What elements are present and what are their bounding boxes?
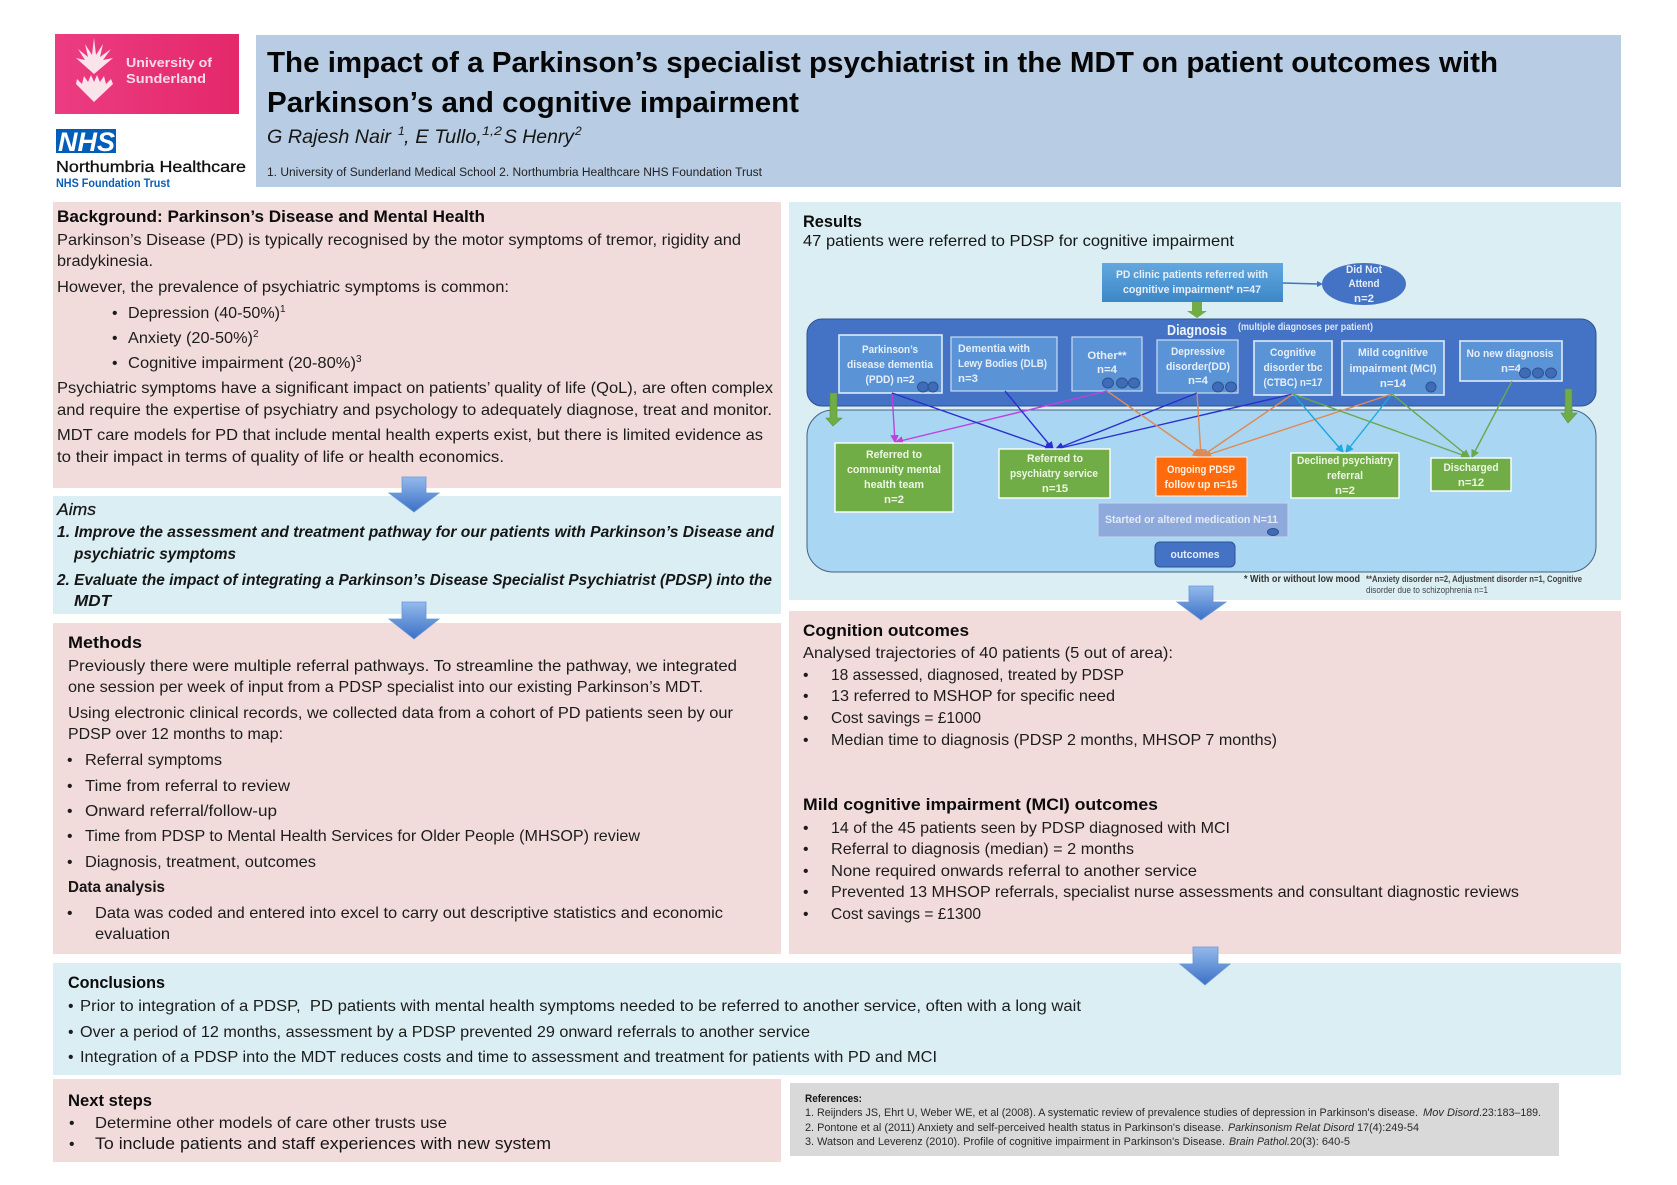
box: discharged — [1431, 458, 1511, 491]
list: data mapped: Diagnosis, treatment, outcomes — [85, 854, 316, 871]
text block: methods intro: Previously there were multiple referral pathways. To streamline the pathway, we integrated — [68, 658, 737, 675]
text block: conclusions list: • — [68, 1049, 74, 1066]
box: PDD: (PDD) n=2 — [866, 374, 914, 386]
text block: aims list: psychiatric symptoms — [73, 546, 236, 563]
authors: 2 — [574, 124, 582, 138]
text block: MCI outcomes: • — [803, 820, 809, 837]
text block: aims list: MDT — [74, 593, 112, 610]
text block: data analysis: evaluation — [95, 926, 170, 943]
authors — [267, 124, 582, 148]
text block: data analysis: • — [67, 905, 73, 922]
heading: next steps: Next steps — [68, 1092, 152, 1110]
text block: next steps list: To include patients and staff experiences with new system — [95, 1134, 551, 1153]
authors: S Henry — [504, 126, 575, 148]
box: cognitive disorder tbc — [1254, 341, 1332, 395]
box: mild cognitive impairment — [1342, 341, 1444, 395]
list: data mapped: • — [67, 778, 73, 795]
panel: background — [53, 202, 781, 488]
arrow: background to aims — [389, 477, 439, 512]
panel: methods — [53, 623, 781, 954]
ellipse: did not attend — [1322, 263, 1406, 305]
box: psychiatry service — [999, 449, 1110, 498]
arrow: referrals to did not attend — [1283, 281, 1323, 287]
text block: background body: Parkinson’s Disease (PD) is typically recognised by the motor symptoms of tremor, rigidity and — [57, 232, 741, 249]
box: PD clinic referrals — [1102, 263, 1283, 302]
text block: methods intro: Using electronic clinical records, we collected data from a cohort of PD patients seen by our — [68, 705, 733, 722]
panel: references: Brain Pathol. — [1229, 1136, 1290, 1148]
panel: references: 2. Pontone et al (2011) Anxiety and self-perceived health status in Parkinson's disease. — [805, 1122, 1224, 1134]
box: PD clinic referrals: PD clinic patients referred with — [1116, 269, 1268, 281]
text block: MCI outcomes: • — [803, 884, 809, 901]
text block: background body: • — [112, 355, 118, 372]
box: PDD: disease dementia — [847, 359, 934, 371]
text block: aims list: 1. Improve the assessment and treatment pathway for our patients with Parkinson’s Disease and — [57, 524, 774, 541]
logo: NHS Northumbria Healthcare — [56, 127, 246, 190]
box: cognitive disorder tbc: disorder tbc — [1264, 362, 1322, 374]
text block: conclusions list: Integration of a PDSP into the MDT reduces costs and time to assessment and treatment for patients with PD and MCI — [80, 1049, 937, 1066]
box: no new diagnosis: n=4 — [1501, 363, 1522, 375]
box: ongoing follow up: follow up n=15 — [1164, 479, 1238, 491]
label: outcomes: outcomes — [1170, 549, 1220, 561]
text block: cognition outcomes: • — [803, 667, 809, 684]
box: DLB: n=3 — [958, 373, 978, 385]
text block: conclusions list — [68, 998, 1082, 1066]
box: ongoing follow up: Ongoing PDSP — [1167, 464, 1235, 476]
arrow: outcomes to conclusions — [1180, 947, 1230, 985]
box: ongoing follow up — [1156, 457, 1247, 496]
text block: next steps list: • — [69, 1136, 75, 1153]
panel: aims — [53, 496, 781, 614]
box: community mental health team: community mental — [847, 464, 941, 476]
connectors: diagnosis to outcome — [892, 381, 1512, 457]
title banner — [256, 35, 1621, 187]
ellipse: did not attend: Attend — [1348, 278, 1380, 290]
text block: cognition outcomes: • — [803, 710, 809, 727]
footnotes: disorder due to schizophrenia n=1 — [1366, 584, 1488, 595]
box: DLB: Lewy Bodies (DLB) — [958, 358, 1047, 370]
text block: background body: • — [112, 330, 118, 347]
box: psychiatry service: n=15 — [1042, 483, 1069, 495]
text block: MCI outcomes — [803, 820, 1519, 923]
text block: background body: Cognitive impairment (20-80%) — [128, 355, 356, 372]
text: results summary: 47 patients were referred to PDSP for cognitive impairment — [803, 233, 1235, 250]
logo: University of Sunderland: Sunderland — [126, 71, 206, 86]
heading: aims: Aims — [56, 501, 96, 519]
box: cognitive disorder tbc: Cognitive — [1270, 347, 1316, 359]
panel: next steps — [53, 1079, 781, 1162]
box: declined referral: n=2 — [1335, 485, 1355, 497]
text block: background body: and require the expertise of psychiatry and psychology to adequately diagnose, treat and monitor. — [57, 402, 772, 419]
arrow: diagnosis to outcomes right — [1561, 389, 1577, 423]
text block: background body: Anxiety (20-50%) — [128, 330, 253, 347]
heading: results: Results — [803, 213, 862, 231]
box: medication: Started or altered medication N=11 — [1105, 514, 1279, 526]
text block: cognition outcomes: Analysed trajectories of 40 patients (5 out of area): — [803, 645, 1173, 662]
text block: data analysis: Data was coded and entered into excel to carry out descriptive statistics and economic — [95, 905, 723, 922]
box: community mental health team: Referred to — [866, 449, 922, 461]
text block: conclusions list: • — [68, 1024, 74, 1041]
text block: aims list — [56, 524, 774, 610]
logo: NHS Northumbria Healthcare: Northumbria Healthcare — [56, 159, 246, 176]
box: declined referral — [1291, 453, 1399, 498]
text block: MCI outcomes: Prevented 13 MHSOP referrals, specialist nurse assessments and consultant diagnostic reviews — [831, 884, 1519, 901]
box: mild cognitive impairment: Mild cognitive — [1358, 347, 1428, 359]
heading: cognition outcomes: Cognition outcomes — [803, 622, 969, 640]
box: discharged: Discharged — [1444, 462, 1499, 474]
logo: NHS Northumbria Healthcare: NHS — [58, 127, 115, 157]
box: depressive disorder: n=4 — [1188, 375, 1209, 387]
list: data mapped: • — [67, 803, 73, 820]
box: mild cognitive impairment: n=14 — [1380, 378, 1407, 390]
note: multiple diagnoses: (multiple diagnoses per patient) — [1238, 322, 1373, 333]
box: discharged: n=12 — [1458, 477, 1484, 489]
text block: MCI outcomes: • — [803, 906, 809, 923]
text block: cognition outcomes: Cost savings = £1000 — [831, 710, 981, 727]
box: DLB: Dementia with — [958, 343, 1030, 355]
text block: MCI outcomes: Referral to diagnosis (median) = 2 months — [831, 841, 1134, 858]
list: data mapped — [67, 752, 641, 871]
footnotes — [1244, 573, 1582, 595]
text block: MCI outcomes: • — [803, 863, 809, 880]
band: outcomes — [807, 410, 1596, 572]
footnotes: **Anxiety disorder n=2, Adjustment disorder n=1, Cognitive — [1366, 573, 1582, 584]
text block: conclusions list: Prior to integration of a PDSP, PD patients with mental health symptoms needed to be referred to another service, often with a long wait — [80, 998, 1082, 1015]
panel: references: 3. Watson and Leverenz (2010). Profile of cognitive impairment in Parkinson's Disease. — [805, 1136, 1225, 1148]
box: DLB — [951, 337, 1057, 391]
list: data mapped: • — [67, 752, 73, 769]
box: PDD — [839, 335, 942, 393]
heading: background: Background: Parkinson’s Disease and Mental Health — [57, 208, 485, 226]
box: depressive disorder: disorder(DD) — [1166, 361, 1230, 373]
text block: next steps list: • — [69, 1115, 75, 1132]
arrow: aims to methods — [389, 602, 439, 639]
panel: references: Mov Disord — [1423, 1107, 1480, 1119]
panel: references: 20(3): 640-5 — [1290, 1136, 1350, 1148]
ellipse: did not attend: n=2 — [1354, 293, 1374, 305]
text block: background body: However, the prevalence of psychiatric symptoms is common: — [57, 279, 509, 296]
heading: diagnosis: Diagnosis — [1167, 323, 1227, 339]
text block: MCI outcomes: Cost savings = £1300 — [831, 906, 981, 923]
text block: cognition outcomes: • — [803, 688, 809, 705]
panel: references — [790, 1083, 1559, 1156]
text block: MCI outcomes: None required onwards referral to another service — [831, 863, 1197, 880]
heading: methods: Methods — [68, 634, 142, 652]
text block: background body: Psychiatric symptoms have a significant impact on patients’ quality of life (QoL), are often complex — [57, 380, 773, 397]
text block: aims list: 2. Evaluate the impact of integrating a Parkinson’s Disease Specialist Psychiatrist (PDSP) into the — [56, 572, 772, 589]
box: other — [1072, 337, 1142, 391]
text block: next steps list: Determine other models of care other trusts use — [95, 1115, 447, 1132]
panel: references: References: — [805, 1093, 862, 1105]
band: diagnosis — [807, 319, 1596, 406]
panel: cognition and MCI outcomes — [789, 611, 1621, 954]
box: psychiatry service: Referred to — [1027, 453, 1083, 465]
text block: background body: • — [112, 305, 118, 322]
text block: next steps list — [69, 1115, 551, 1153]
text block: cognition outcomes: 13 referred to MSHOP for specific need — [831, 688, 1115, 705]
box: mild cognitive impairment: impairment (MCI) — [1350, 363, 1437, 375]
box: depressive disorder: Depressive — [1171, 346, 1225, 358]
text block: background body: bradykinesia. — [57, 253, 153, 270]
authors: , E Tullo, — [404, 126, 482, 148]
title — [267, 47, 1498, 119]
text block: cognition outcomes: 18 assessed, diagnosed, treated by PDSP — [831, 667, 1124, 684]
text block: background body: 2 — [253, 329, 259, 340]
list: data mapped: Time from PDSP to Mental Health Services for Older People (MHSOP) review — [85, 828, 641, 845]
logo: University of Sunderland — [55, 34, 239, 114]
text block: background body: 3 — [356, 354, 362, 365]
text block: cognition outcomes — [803, 645, 1277, 749]
heading: conclusions: Conclusions — [68, 974, 165, 992]
authors: 1,2 — [482, 124, 502, 138]
box: community mental health team: n=2 — [884, 494, 904, 506]
arrow: referrals to diagnosis — [1187, 302, 1207, 318]
box: medication — [1098, 503, 1288, 537]
text block: background body: MDT care models for PD that include mental health experts exist, but there is limited evidence as — [57, 427, 763, 444]
affiliations: 1. University of Sunderland Medical School 2. Northumbria Healthcare NHS Foundation Trust — [267, 167, 763, 179]
panel: references: 17(4):249-54 — [1357, 1122, 1419, 1134]
box: declined referral: referral — [1327, 470, 1363, 482]
heading: MCI outcomes: Mild cognitive impairment (MCI) outcomes — [803, 796, 1158, 814]
title: The impact of a Parkinson’s specialist psychiatrist in the MDT on patient outcomes with — [267, 47, 1498, 79]
box: no new diagnosis: No new diagnosis — [1466, 348, 1554, 360]
text block: MCI outcomes: • — [803, 841, 809, 858]
text block: conclusions list: Over a period of 12 months, assessment by a PDSP prevented 29 onward referrals to another service — [80, 1024, 810, 1041]
text block: methods intro — [68, 658, 737, 743]
text block: methods intro: PDSP over 12 months to map: — [68, 726, 283, 743]
text block: cognition outcomes: Median time to diagnosis (PDSP 2 months, MHSOP 7 months) — [831, 732, 1277, 749]
box: other: Other** — [1087, 350, 1127, 362]
text block: background body: 1 — [280, 304, 286, 315]
text block: data analysis: Data analysis — [68, 879, 165, 896]
text block: cognition outcomes: • — [803, 732, 809, 749]
box: cognitive disorder tbc: (CTBC) n=17 — [1264, 377, 1322, 389]
logo: University of Sunderland: University of — [126, 55, 213, 70]
flowchart: patient pathway — [807, 263, 1596, 595]
title: Parkinson’s and cognitive impairment — [267, 87, 799, 119]
box: psychiatry service: psychiatry service — [1010, 468, 1098, 480]
box: community mental health team — [835, 443, 953, 512]
panel: references: 1. Reijnders JS, Ehrt U, Weber WE, et al (2008). A systematic review of prevalence studies of depression in Parkinson's disease. — [805, 1107, 1418, 1119]
text block: methods intro: one session per week of input from a PDSP specialist into our existing Parkinson’s MDT. — [68, 679, 703, 696]
text block: background body: to their impact in terms of quality of life or health economics. — [57, 449, 504, 466]
text block: conclusions list: • — [68, 998, 74, 1015]
box: declined referral: Declined psychiatry — [1297, 455, 1394, 467]
box: other: n=4 — [1097, 364, 1118, 376]
authors: G Rajesh Nair — [267, 126, 393, 148]
panel: references: Parkinsonism Relat Disord — [1228, 1122, 1355, 1134]
text block: background body — [57, 232, 773, 466]
footnotes: * With or without low mood — [1244, 574, 1360, 585]
box: community mental health team: health team — [864, 479, 924, 491]
list: data mapped: • — [67, 828, 73, 845]
label: outcomes — [1155, 542, 1235, 567]
arrow: results to cognition outcomes — [1177, 586, 1226, 620]
list: data mapped: Referral symptoms — [85, 752, 222, 769]
panel: results — [789, 202, 1621, 600]
text block: background body: Depression (40-50%) — [128, 305, 280, 322]
arrow: diagnosis to outcomes left — [826, 393, 842, 426]
panel: conclusions — [53, 963, 1621, 1075]
text block: data analysis — [67, 879, 723, 943]
authors: 1 — [398, 124, 405, 138]
ellipse: did not attend: Did Not — [1346, 264, 1382, 276]
box: depressive disorder — [1157, 340, 1238, 393]
box: PD clinic referrals: cognitive impairment* n=47 — [1123, 284, 1261, 296]
box: no new diagnosis — [1460, 341, 1562, 381]
list: data mapped: Onward referral/follow-up — [85, 803, 277, 820]
list: data mapped: • — [67, 854, 73, 871]
text block: MCI outcomes: 14 of the 45 patients seen by PDSP diagnosed with MCI — [831, 820, 1230, 837]
list: data mapped: Time from referral to review — [85, 778, 291, 795]
logo: NHS Northumbria Healthcare: NHS Foundation Trust — [56, 178, 170, 190]
box: PDD: Parkinson’s — [862, 344, 918, 356]
panel: references: .23:183–189. — [1479, 1107, 1541, 1119]
